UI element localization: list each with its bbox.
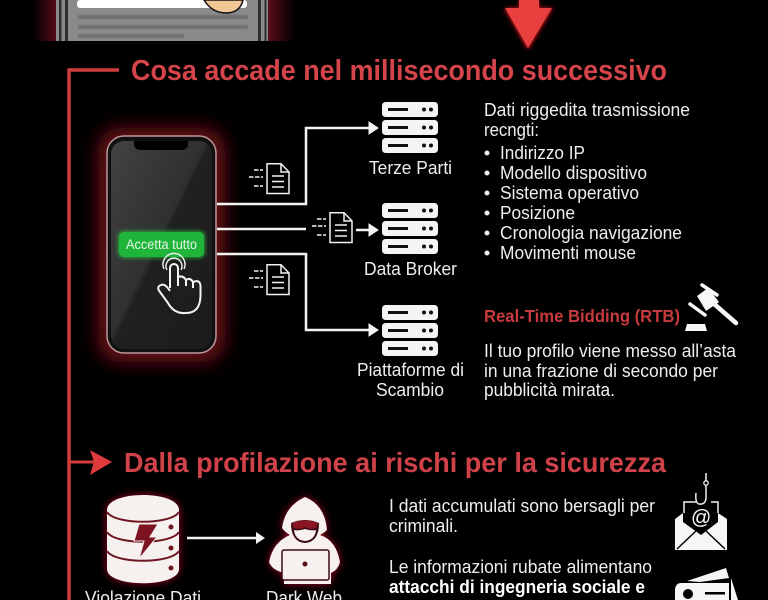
text block: dati: Cronologia navigazione xyxy=(500,222,682,243)
text block: dati: Dati riggedita trasmissione xyxy=(484,99,690,120)
icon: hacker xyxy=(269,497,340,584)
accept button xyxy=(118,231,205,258)
text block: dati: recngti: xyxy=(484,119,539,140)
icon: phishing email: @ xyxy=(691,507,711,529)
label: piattaforme di scambio: Scambio xyxy=(376,379,444,400)
label: terze parti: Terze Parti xyxy=(369,157,452,178)
text block: dati: Sistema operativo xyxy=(500,182,639,203)
heading: cosa accade: Cosa accade nel millisecondo successivo xyxy=(131,55,667,87)
text block: rtb: in una frazione di secondo per xyxy=(484,360,718,381)
connector: piattaforme xyxy=(217,254,378,336)
main phone xyxy=(98,128,225,362)
text block: rischi: I dati accumulati sono bersagli per xyxy=(389,495,655,516)
text block: rtb xyxy=(484,340,737,400)
label: piattaforme di scambio: Piattaforme di xyxy=(357,359,464,380)
accept button: Accetta tutto xyxy=(126,237,197,252)
text block: rischi: criminali. xyxy=(389,515,458,536)
icon: tapping hand xyxy=(158,253,200,313)
text block: rischi xyxy=(389,495,655,597)
text block: dati: Movimenti mouse xyxy=(500,242,636,263)
heading: real-time bidding: Real-Time Bidding (RTB) xyxy=(484,306,680,326)
connector: terze parti xyxy=(217,122,378,204)
icon: document 1 xyxy=(249,164,289,194)
icon: document 2 xyxy=(312,213,352,242)
text block: dati xyxy=(484,99,690,263)
branch arrow xyxy=(70,450,112,475)
down arrow xyxy=(504,0,553,50)
icon: document 3 xyxy=(249,265,289,294)
top phone illustration xyxy=(33,0,295,41)
connector: data broker xyxy=(217,224,378,236)
text block: rtb: pubblicità mirata. xyxy=(484,379,615,400)
icon: id card xyxy=(675,568,738,600)
text block: rischi: Le informazioni rubate alimentano xyxy=(389,556,652,577)
server: data broker xyxy=(382,203,438,254)
server: piattaforme xyxy=(382,305,438,356)
text block: rischi: attacchi di ingegneria sociale e xyxy=(389,577,645,597)
icon: database breach xyxy=(107,495,179,583)
icon: phishing email xyxy=(675,473,727,550)
heading: rischi: Dalla profilazione ai rischi per la sicurezza xyxy=(124,447,666,478)
arrow: to dark web xyxy=(187,532,265,544)
text block: rtb: Il tuo profilo viene messo all’asta xyxy=(484,340,737,361)
label: piattaforme di scambio xyxy=(357,359,464,400)
section connector line xyxy=(69,70,119,600)
server: terze parti xyxy=(382,102,438,153)
text block: dati: Posizione xyxy=(500,202,575,223)
text block: dati: Modello dispositivo xyxy=(500,162,647,183)
icon: gavel xyxy=(685,285,736,331)
label: data broker: Data Broker xyxy=(364,258,457,279)
text block: dati: Indirizzo IP xyxy=(500,142,585,163)
